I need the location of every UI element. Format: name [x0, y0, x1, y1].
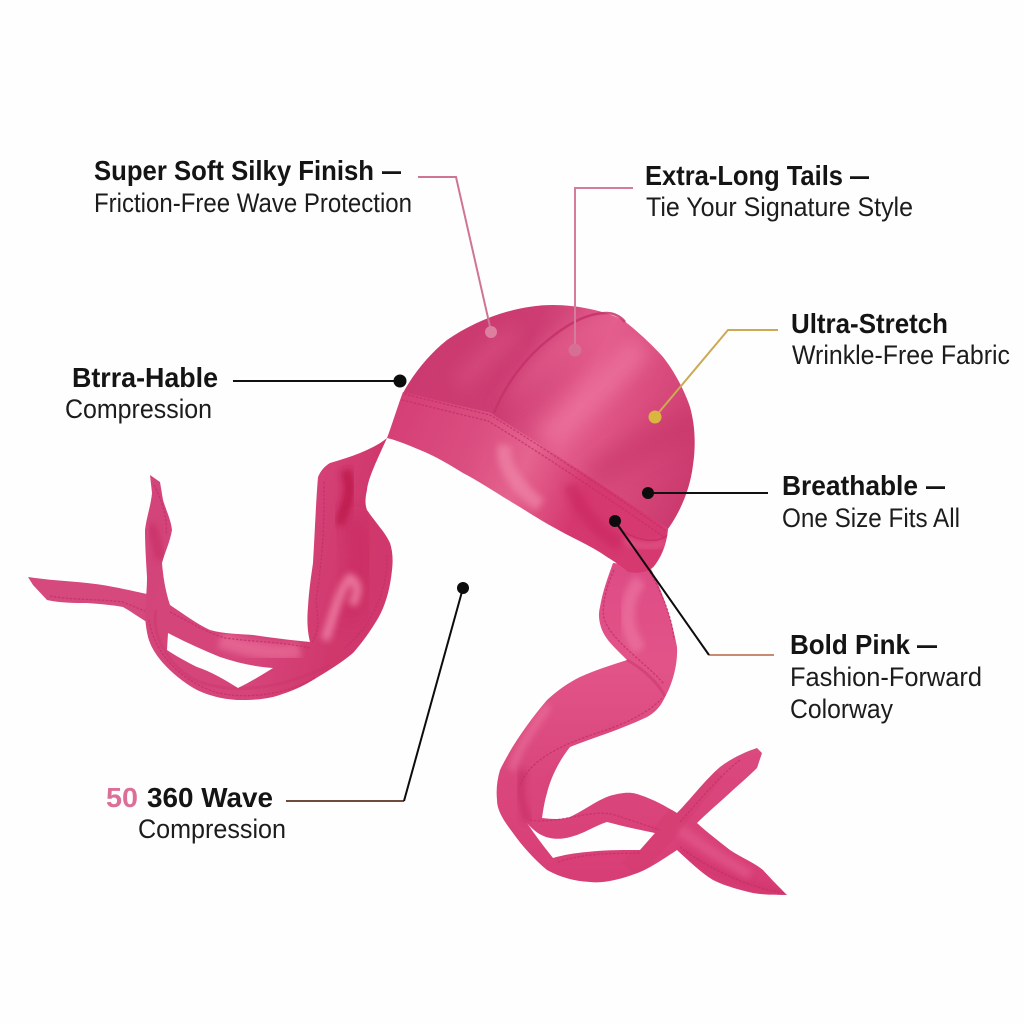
callout: Bold Pink: Colorway — [790, 694, 893, 724]
callout: Btrra-Hable: Compression — [65, 394, 212, 424]
callout: Extra-Long Tails: Extra-Long Tails — [645, 160, 843, 191]
cap dome — [403, 305, 700, 529]
callout: Breathable — [642, 470, 960, 533]
callout: Breathable: — — [926, 470, 945, 501]
callout: Ultra-Stretch: Ultra-Stretch — [791, 308, 948, 339]
callout: Extra-Long Tails: — — [850, 160, 869, 191]
callout: Super Soft Silky Finish: — — [382, 155, 401, 186]
callout: Bold Pink: — — [917, 629, 937, 660]
left tail: loop, strap and wide satin panel — [145, 438, 393, 700]
callout: Extra-Long Tails — [568, 160, 913, 356]
callout: Super Soft Silky Finish — [94, 155, 497, 338]
callout: Btrra-Hable: Btrra-Hable — [72, 362, 218, 393]
callout: Bold Pink — [609, 515, 982, 724]
callout: Bold Pink: Fashion-Forward — [790, 662, 982, 692]
callout: Btrra-Hable — [65, 362, 406, 424]
callout: Extra-Long Tails: Tie Your Signature Style — [646, 192, 913, 222]
right tail — [497, 563, 787, 895]
callout: Breathable: One Size Fits All — [782, 503, 960, 533]
callout: Breathable: Breathable — [782, 470, 918, 501]
callout: 360 Wave — [106, 582, 469, 844]
callout: Ultra-Stretch — [648, 308, 1010, 424]
panel seam — [494, 313, 625, 413]
illustration: pink silky durag — [28, 305, 787, 895]
callout: Ultra-Stretch: Wrinkle-Free Fabric — [792, 340, 1010, 370]
left tail: strap end — [28, 577, 147, 622]
callout: Super Soft Silky Finish: Super Soft Silky Finish — [94, 155, 374, 186]
callout: 360 Wave: Compression — [138, 814, 286, 844]
cap band — [387, 392, 668, 573]
callout: 360 Wave: 360 Wave — [147, 782, 273, 813]
callout: Bold Pink: Bold Pink — [790, 629, 910, 660]
callout: 360 Wave: 50 — [106, 782, 138, 813]
callout: Super Soft Silky Finish: Friction-Free Wave Protection — [94, 188, 412, 218]
